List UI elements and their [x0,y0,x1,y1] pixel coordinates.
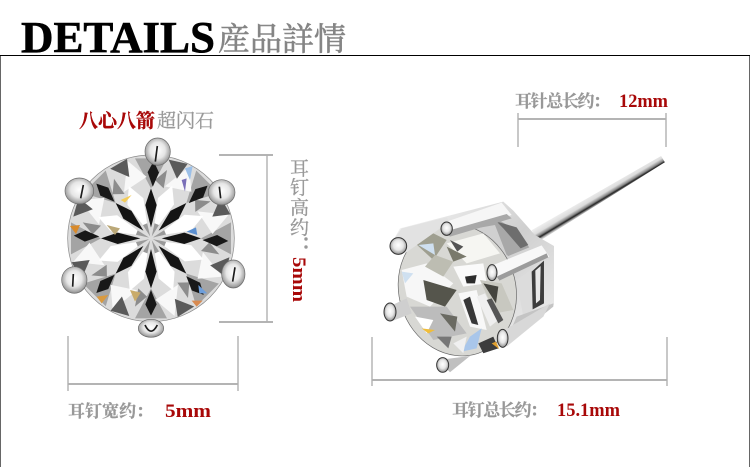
dimension: total length: 15.1mm [557,401,621,421]
title [21,13,346,62]
vertical label: 耳 [290,158,309,180]
dimension: earring width: 耳钉宽约： [68,402,153,421]
dimension: pin length [515,92,669,147]
heading: DETAILS: DETAILS [21,13,215,62]
vertical label: 约 [290,217,309,239]
setting [393,202,554,348]
dimension: earring width: 5mm [165,402,212,422]
dimension: total length: 耳钉总长约： [452,401,547,420]
dimension: pin length: 12mm [619,92,669,112]
prongs [62,138,245,337]
diamond facets [68,155,234,322]
dimension: total length [372,337,667,421]
pin [532,153,666,242]
heading: chinese subtitle: 産品詳情 [218,21,346,57]
value: 5mm: 5mm [288,257,308,303]
caption: eight hearts eight arrows: 八心八箭超闪石 [79,110,214,132]
stone [381,209,533,371]
dimension: earring width [68,336,238,422]
vertical label: 高 [290,197,309,219]
prongs [384,203,550,372]
dimension: pin length: 耳针总长约： [515,92,610,111]
vertical label: 钉 [290,177,309,199]
dimension: earring height [219,155,309,322]
icon: side view stud earring [381,153,666,372]
icon: top view diamond stud [62,138,245,337]
vertical label [290,158,309,249]
